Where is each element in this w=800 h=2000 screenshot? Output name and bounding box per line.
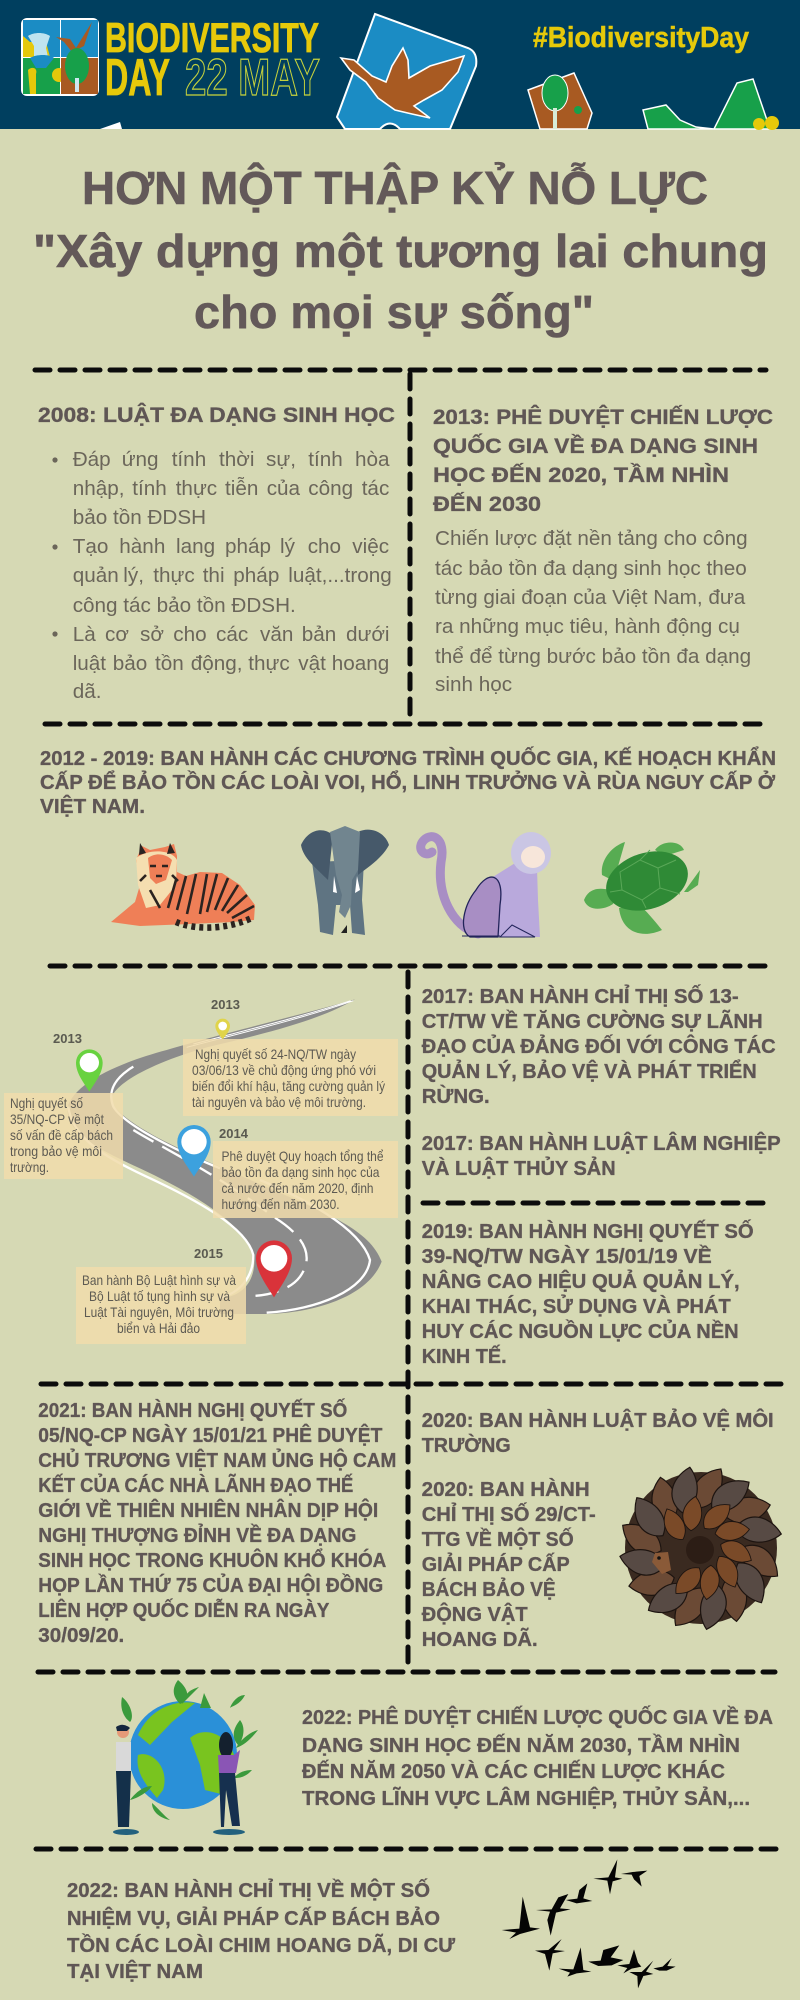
bullet list: lý,	[123, 564, 144, 587]
bullet list: luật,...trong	[288, 564, 392, 587]
bullet list: bảo	[113, 652, 147, 675]
panel: 2022 national strategy 2030	[302, 1705, 773, 1810]
panel: 2017 directive: CT/TW VỀ TĂNG CƯỜNG SỰ LÃNH	[422, 1009, 763, 1033]
bullet list: động,	[191, 652, 242, 675]
panel: 2012-2019 programmes heading: CẤP ĐỂ BẢO TỒN CÁC LOÀI VOI, HỔ, LINH TRƯỞNG VÀ RÙA NGUY CẤP Ở	[40, 770, 776, 794]
bullet list: công	[308, 477, 353, 500]
bullet list: Là	[73, 623, 96, 646]
note: resolution 35: Nghị quyết số	[10, 1096, 83, 1111]
bullet list: vật	[298, 652, 326, 675]
note: resolution 35: trong bảo vệ môi	[10, 1144, 102, 1159]
bullet list: Đáp	[73, 448, 111, 471]
panel: 2017 directive	[422, 984, 776, 1108]
note: conservation plan	[213, 1141, 398, 1218]
panel: 2020 directive 29	[422, 1478, 596, 1651]
panel: 2022 wild birds directive: TỒN CÁC LOÀI CHIM HOANG DÃ, DI CƯ	[67, 1933, 455, 1957]
icon: elephant	[301, 826, 389, 935]
panel: 2013 national strategy: HỌC ĐẾN 2020, TẦM NHÌN	[433, 462, 729, 487]
panel: 2021 resolution: NGHỊ THƯỢNG ĐỈNH VỀ ĐA DẠNG	[38, 1524, 356, 1547]
bullet list: lang	[176, 535, 215, 558]
panel: 2017 directive: RỪNG.	[422, 1084, 490, 1108]
icon: biodiversity logo	[21, 18, 99, 96]
bullet list: lý	[280, 535, 296, 558]
strategy text: sinh học	[435, 673, 512, 696]
title: "Xây dựng một tương lai chung	[33, 225, 768, 277]
bullet list: cho	[308, 535, 341, 558]
bullet list: tồn	[155, 652, 184, 675]
figure: man	[113, 1725, 139, 1835]
note: penal code: Luật Tài nguyên, Môi trường	[84, 1305, 234, 1320]
logo wordmark: DAY	[105, 49, 170, 107]
panel: 2017 directive: QUẢN LÝ, BẢO VỆ VÀ PHÁT TRIỂN	[422, 1059, 757, 1083]
bullet list: công tác bảo tồn ĐDSH.	[73, 594, 296, 617]
panel: 2022 national strategy 2030: 2022: PHÊ DUYỆT CHIẾN LƯỢC QUỐC GIA VỀ ĐA	[302, 1705, 773, 1729]
panel: 2022 wild birds directive: TẠI VIỆT NAM	[67, 1959, 203, 1983]
strategy text: Chiến lược đặt nền tảng cho công	[435, 527, 748, 550]
strategy text	[435, 527, 751, 696]
panel: 2017 forestry and fisheries law: VÀ LUẬT THỦY SẢN	[422, 1156, 616, 1180]
hashtag: #BiodiversityDay	[533, 22, 749, 54]
panel: 2019 resolution: 2019: BAN HÀNH NGHỊ QUYẾT SỐ	[422, 1219, 754, 1243]
title: HƠN MỘT THẬP KỶ NỖ LỰC	[82, 162, 708, 214]
bullet list: thực	[153, 564, 195, 587]
bullet list: hành	[119, 535, 165, 558]
panel: 2021 resolution: HỌP LẦN THỨ 75 CỦA ĐẠI HỘI ĐỒNG	[38, 1573, 383, 1597]
panel: 2013 national strategy: ĐẾN 2030	[433, 491, 541, 516]
icon: pangolin	[615, 1462, 786, 1633]
panel: 2020 directive 29: ĐỘNG VẬT	[422, 1602, 528, 1626]
bullet list: dưới	[346, 623, 390, 646]
panel: 2019 resolution: HUY CÁC NGUỒN LỰC CỦA NỀN	[422, 1319, 739, 1343]
pin: 2013 yellow	[215, 1019, 230, 1039]
bullet list: hòa	[355, 448, 390, 471]
note: conservation plan: cả nước đến năm 2020, định	[222, 1181, 374, 1196]
panel: 2022 national strategy 2030: TRONG LĨNH VỰC LÂM NGHIỆP, THỦY SẢN,...	[302, 1786, 750, 1810]
note: penal code: Bộ Luật tố tụng hình sự và	[89, 1289, 230, 1304]
bullet list: luật	[73, 652, 106, 675]
bullet list: các	[216, 623, 248, 646]
note: penal code	[76, 1267, 246, 1344]
strategy text: ra những mục tiêu, hành động cụ	[435, 615, 740, 638]
panel: 2017 forestry and fisheries law	[422, 1131, 781, 1180]
panel: 2012-2019 programmes heading: 2012 - 2019: BAN HÀNH CÁC CHƯƠNG TRÌNH QUỐC GIA, KẾ HOẠCH KHẨN	[40, 746, 776, 770]
bullet list: việc	[352, 535, 389, 558]
panel: 2019 resolution	[422, 1219, 754, 1368]
bullet list: pháp	[233, 564, 279, 587]
note: penal code: Ban hành Bộ Luật hình sự và	[82, 1273, 236, 1288]
panel: 2008 biodiversity law	[38, 402, 395, 703]
panel: 2021 resolution: SINH HỌC TRONG KHUÔN KHỔ KHÓA	[38, 1548, 386, 1572]
note: resolution 35: 35/NQ-CP về một	[10, 1112, 104, 1127]
panel: 2020 directive 29: BÁCH BẢO VỆ	[422, 1577, 556, 1601]
panel: 2020 directive 29: TTG VỀ MỘT SỐ	[422, 1527, 574, 1551]
bullet list: Tạo	[73, 535, 108, 558]
year label 2013: 2013	[211, 997, 240, 1012]
icon: flock of birds	[502, 1859, 676, 1988]
icon: globe with people	[113, 1680, 258, 1835]
note: resolution 24: biến đổi khí hậu, tăng cường quản lý	[192, 1079, 385, 1094]
panel: 2022 wild birds directive	[67, 1878, 455, 1983]
logo wordmark: BIODIVERSITY	[105, 14, 319, 61]
strategy text: tác bảo tồn đa dạng sinh học theo	[435, 557, 747, 580]
panel: 2019 resolution: 39-NQ/TW NGÀY 15/01/19 VỀ	[422, 1245, 712, 1268]
strategy text: thể để từng bước bảo tồn đa dạng	[435, 645, 751, 668]
heading: 2008: 2008: LUẬT ĐA DẠNG SINH HỌC	[38, 402, 395, 427]
panel: 2021 resolution: 30/09/20.	[38, 1624, 124, 1647]
title	[33, 162, 768, 338]
icon: goose card	[337, 14, 476, 129]
panel: 2020 directive 29: GIẢI PHÁP CẤP	[422, 1553, 570, 1576]
icon: sea turtle	[584, 841, 700, 934]
panel: 2020 directive 29: HOANG DÃ.	[422, 1628, 538, 1651]
note: resolution 24: 03/06/13 về chủ động ứng phó với	[192, 1063, 376, 1078]
bullet list: bảo tồn ĐDSH	[73, 506, 206, 529]
pin: 2013 green	[76, 1049, 103, 1092]
panel: 2019 resolution: KINH TẾ.	[422, 1345, 507, 1368]
bullet list: cơ	[105, 623, 129, 646]
note: resolution 24: tài nguyên và bảo vệ môi trường.	[192, 1095, 366, 1110]
bullet list: quản	[73, 564, 119, 587]
note: resolution 35: trường.	[10, 1160, 49, 1175]
year label 2013: 2013	[53, 1031, 82, 1046]
panel: 2022 wild birds directive: NHIỆM VỤ, GIẢI PHÁP CẤP BÁCH BẢO	[67, 1906, 440, 1930]
bullet list: thi	[203, 564, 225, 587]
panel: 2022 national strategy 2030: ĐẾN NĂM 2050 VÀ CÁC CHIẾN LƯỢC KHÁC	[302, 1760, 725, 1783]
strategy text: từng giai đoạn của Việt Nam, đưa	[435, 586, 746, 609]
bullet list: tác	[362, 477, 389, 500]
note: conservation plan: Phê duyệt Quy hoạch tổng thể	[222, 1149, 384, 1164]
panel: 2021 resolution: 05/NQ-CP NGÀY 15/01/21 PHÊ DUYỆT	[38, 1423, 383, 1447]
bullet list: văn	[260, 623, 293, 646]
bullet list: tính	[172, 448, 206, 471]
icon: tiger	[111, 843, 255, 928]
icon: monkey	[421, 832, 551, 937]
bullet list: pháp	[225, 535, 271, 558]
panel: 2012-2019 programmes heading: VIỆT NAM.	[40, 794, 145, 818]
logo wordmark	[105, 14, 320, 107]
title: cho mọi sự sống"	[194, 286, 594, 338]
bullet list	[52, 448, 392, 703]
pin: 2015 red	[256, 1240, 292, 1297]
panel: 2020 directive 29: 2020: BAN HÀNH	[422, 1478, 590, 1501]
panel: 2013 national strategy: QUỐC GIA VỀ ĐA DẠNG SINH	[433, 432, 758, 458]
bullet list: cho	[173, 623, 207, 646]
panel: 2021 resolution: CHỦ TRƯƠNG VIỆT NAM ỦNG HỘ CAM	[38, 1448, 396, 1472]
bullet list: thời	[219, 448, 254, 471]
panel: 2020 directive 29: CHỈ THỊ SỐ 29/CT-	[422, 1502, 596, 1526]
note: conservation plan: bảo tồn đa dạng sinh học của	[222, 1165, 380, 1180]
panel: road timeline	[4, 997, 398, 1344]
note: penal code: biển và Hải đảo	[117, 1321, 200, 1336]
bullet list: thực	[176, 477, 217, 500]
header banner	[0, 0, 800, 130]
bullet list: bản	[302, 623, 336, 646]
figure: woman	[213, 1732, 245, 1835]
panel: 2020 environment law	[422, 1408, 774, 1457]
pin: 2014 blue	[177, 1125, 211, 1177]
icon: green leaf shapes	[100, 79, 779, 130]
panel: 2020 environment law: TRƯỜNG	[422, 1433, 511, 1457]
panel: 2022 wild birds directive: 2022: BAN HÀNH CHỈ THỊ VỀ MỘT SỐ	[67, 1878, 430, 1902]
panel: 2012-2019 programmes heading	[40, 746, 776, 818]
panel: 2019 resolution: NÂNG CAO HIỆU QUẢ QUẢN LÝ,	[422, 1269, 740, 1293]
bullet list: sự,	[266, 448, 296, 471]
bullet list: hoang	[332, 652, 389, 675]
panel: 2019 resolution: KHAI THÁC, SỬ DỤNG VÀ PHÁT	[422, 1294, 731, 1318]
note: resolution 35: số vấn đề cấp bách	[10, 1128, 113, 1143]
panel: 2021 resolution	[38, 1398, 396, 1647]
panel: 2017 directive: 2017: BAN HÀNH CHỈ THỊ SỐ 13-	[422, 984, 739, 1008]
panel: 2013 national strategy	[433, 404, 773, 696]
bullet list: tiễn	[225, 477, 258, 500]
note: conservation plan: hướng đến năm 2030.	[222, 1197, 340, 1212]
year label 2014: 2014	[219, 1126, 249, 1141]
bullet list: nhập,	[73, 477, 124, 500]
panel: 2021 resolution: KẾT CỦA CÁC NHÀ LÃNH ĐẠO THẾ	[38, 1473, 353, 1497]
bullet list: của	[267, 477, 301, 500]
panel: 2021 resolution: 2021: BAN HÀNH NGHỊ QUYẾT SỐ	[38, 1398, 347, 1422]
bullet list: tính	[132, 477, 167, 500]
heading: 2013: 2013: PHÊ DUYỆT CHIẾN LƯỢC	[433, 404, 773, 429]
logo wordmark: 22 MAY	[185, 49, 320, 107]
bullet list: ứng	[122, 448, 159, 471]
panel: 2021 resolution: GIỚI VỀ THIÊN NHIÊN NHÂN DỊP HỘI	[38, 1498, 378, 1522]
panel: 2022 national strategy 2030: DẠNG SINH HỌC ĐẾN NĂM 2030, TẦM NHÌN	[302, 1734, 740, 1757]
note: resolution 35	[4, 1093, 123, 1179]
note: resolution 24: Nghị quyết số 24-NQ/TW ngày	[195, 1047, 356, 1062]
bullet list: tính	[308, 448, 343, 471]
icon: tree card	[528, 73, 592, 129]
panel: 2020 environment law: 2020: BAN HÀNH LUẬT BẢO VỆ MÔI	[422, 1408, 774, 1432]
panel: 2017 directive: ĐẠO CỦA ĐẢNG ĐỐI VỚI CÔNG TÁC	[422, 1034, 776, 1058]
panel: 2021 resolution: LIÊN HỢP QUỐC DIỄN RA NGÀY	[38, 1598, 330, 1622]
bullet list: thực	[248, 652, 290, 675]
panel: 2017 forestry and fisheries law: 2017: BAN HÀNH LUẬT LÂM NGHIỆP	[422, 1131, 781, 1155]
note: resolution 24	[183, 1039, 398, 1116]
year label 2015: 2015	[194, 1246, 223, 1261]
bullet list: sở	[140, 623, 164, 646]
road chart	[68, 999, 382, 1314]
bullet list: dã.	[73, 680, 101, 703]
